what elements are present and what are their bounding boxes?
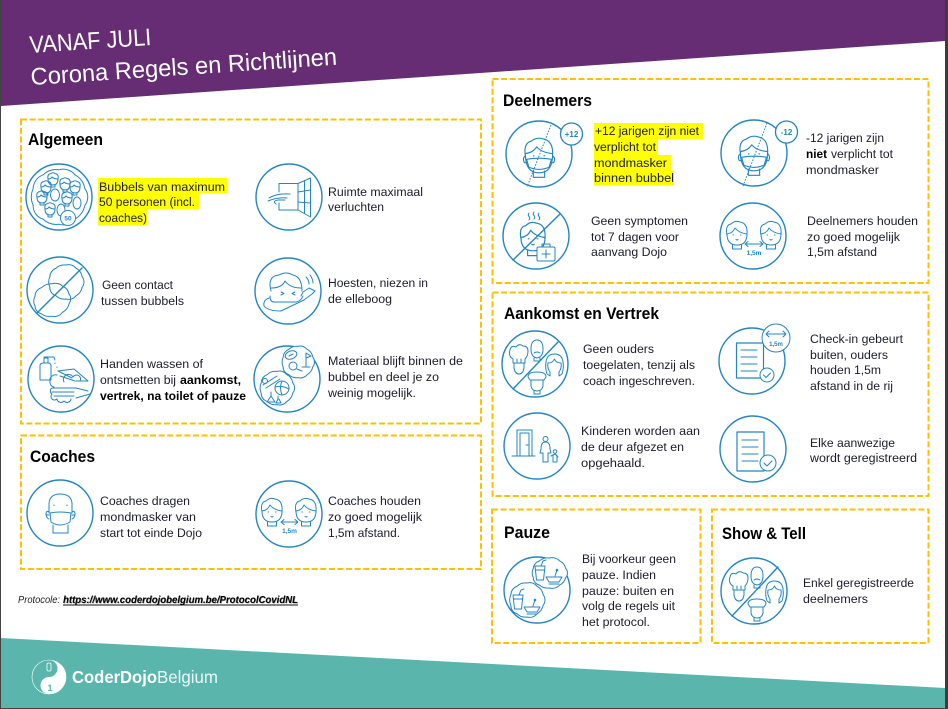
text: elke aanwezige: wordt geregistreerd	[809, 451, 917, 465]
text: handen	[100, 357, 246, 403]
text: pauze: pauze: buiten en	[582, 584, 674, 598]
icon: no parents	[502, 331, 568, 397]
text: geen symptomen: aanvang Dojo	[591, 245, 667, 259]
panel: Aankomst en Vertrek	[492, 292, 928, 496]
icon: participants 1,5m distance: 1,5m	[747, 250, 762, 257]
text: coaches mondmasker: Coaches dragen	[100, 494, 190, 508]
icon: washing hands	[28, 346, 94, 412]
text: geen contact: tussen bubbels	[101, 294, 184, 308]
icon: open window	[256, 164, 322, 230]
icon: coach with mask	[27, 480, 93, 546]
icon: -12 mask	[721, 120, 798, 186]
text: deelnemers afstand: Deelnemers houden	[807, 214, 918, 228]
title: Corona Regels en Richtlijnen	[30, 44, 338, 91]
text: +12: verplicht tot	[594, 140, 657, 154]
text: kinderen: Kinderen worden aan	[581, 424, 700, 438]
text: geen symptomen	[591, 214, 688, 259]
icon: yin yang logo	[32, 660, 66, 694]
text: show and tell: Enkel geregistreerde	[803, 576, 914, 590]
panel: Deelnemers	[492, 79, 928, 283]
heading: Deelnemers: Deelnemers	[503, 91, 592, 110]
heading: Coaches: Coaches	[30, 447, 95, 466]
text: ruimte: verluchten	[328, 200, 384, 214]
heading: Algemeen: Algemeen	[28, 130, 103, 149]
text: geen contact	[101, 278, 184, 308]
text: show and tell: deelnemers	[803, 592, 868, 606]
icon: no symptoms	[503, 203, 569, 269]
text: check-in: houden 1,5m	[810, 363, 881, 377]
icon: materials in bubbles	[254, 346, 320, 412]
icon: register document	[720, 416, 786, 482]
text: materiaal: weinig mogelijk.	[327, 386, 416, 400]
text: coaches afstand: 1,5m afstand.	[328, 526, 400, 540]
icon: check-in document	[719, 324, 790, 394]
protocol link: Protocole:	[18, 594, 60, 606]
icon: bubble of 50 people	[26, 164, 92, 230]
logo: CoderDojo Belgium: CoderDojo	[72, 667, 157, 687]
text: hoesten: de elleboog	[328, 292, 392, 306]
window edge: left	[0, 0, 1, 709]
text: -12	[806, 131, 894, 177]
logo: CoderDojo Belgium: Belgium	[157, 667, 218, 687]
text: materiaal: bubbel en deel je zo	[328, 370, 439, 384]
text: deelnemers afstand	[807, 214, 918, 259]
icon: -12 mask: -12	[781, 128, 793, 137]
text: materiaal: Materiaal blijft binnen de	[328, 354, 463, 368]
text: check-in	[810, 332, 904, 393]
text: kinderen	[581, 424, 700, 470]
text: deelnemers afstand: 1,5m afstand	[807, 245, 877, 259]
text: +12: +12 jarigen zijn niet	[595, 124, 700, 138]
panel: Show & Tell	[712, 510, 928, 643]
icon: door with parent and child	[504, 413, 570, 479]
text: check-in: afstand in de rij	[810, 379, 893, 393]
header banner	[1, 0, 945, 106]
text: hoesten	[328, 276, 428, 306]
text: -12: verplicht tot	[831, 147, 894, 161]
text: geen ouders	[583, 342, 695, 388]
text: bubbels: 50 personen (incl.	[99, 195, 195, 209]
text: pauze: volg de regels uit	[582, 599, 676, 613]
icon: coaches 1,5m distance: 1,5m	[282, 528, 297, 535]
text: hoesten: Hoesten, niezen in	[328, 276, 428, 290]
heading: Aankomst en Vertrek: Aankomst en Vertrek	[504, 304, 659, 323]
heading: Show & Tell: Show & Tell	[722, 524, 806, 543]
icon: participants 1,5m distance	[720, 203, 786, 269]
text: pauze: Bij voorkeur geen	[582, 552, 676, 566]
text: coaches afstand	[328, 494, 423, 540]
text: -12: niet	[806, 147, 827, 161]
title: VANAF JULI	[29, 24, 152, 59]
text: check-in: Check-in gebeurt	[810, 332, 904, 346]
window edge: right	[945, 0, 948, 709]
text: coaches afstand: Coaches houden	[328, 494, 421, 508]
protocol link: https://www.coderdojobelgium.be/ProtocolCovidNL	[63, 594, 298, 606]
text: +12: binnen bubbel	[594, 171, 674, 185]
icon: +12 mask	[506, 121, 582, 187]
text: -12: -12 jarigen zijn	[806, 131, 884, 145]
text: coaches mondmasker	[100, 494, 202, 540]
heading: Pauze: Pauze	[504, 523, 550, 542]
icon: coaches 1,5m distance	[256, 481, 322, 547]
icon: cough in elbow	[255, 258, 321, 324]
text: bubbels: coaches)	[99, 211, 147, 225]
logo: CoderDojo Belgium	[32, 660, 218, 694]
text: handen: ontsmetten bij	[100, 373, 176, 387]
text: pauze: pauze. Indien	[582, 568, 656, 582]
text: pauze: het protocol.	[582, 615, 650, 629]
text: bubbels: Bubbels van maximum	[99, 180, 225, 194]
text: geen ouders: coach ingeschreven.	[583, 374, 695, 388]
text: coaches mondmasker: mondmasker van	[100, 510, 196, 524]
text: pauze	[582, 552, 676, 629]
icon: check-in document: 1,5m	[769, 342, 783, 348]
text: +12	[594, 123, 703, 186]
text: ruimte: Ruimte maximaal	[328, 185, 423, 199]
protocol link: https://www.coderdojobelgium.be/ProtocolCovidNL	[64, 595, 299, 607]
text: handen: Handen wassen of	[100, 357, 204, 371]
panel: Coaches	[21, 436, 481, 569]
text: geen symptomen: tot 7 dagen voor	[591, 230, 679, 244]
window edge: bottom	[0, 708, 948, 709]
text: bubbels	[98, 178, 227, 226]
icon: bubble of 50 people: 50	[64, 216, 72, 222]
footer banner	[1, 638, 945, 708]
text: +12: mondmasker	[594, 156, 667, 170]
icon: break food in bubbles	[504, 557, 570, 623]
text: geen ouders: toegelaten, tenzij als	[583, 358, 695, 372]
panel: Pauze	[492, 510, 700, 643]
text: geen contact: Geen contact	[102, 278, 174, 292]
text: elke aanwezige: Elke aanwezige	[810, 436, 895, 450]
text: show and tell	[803, 576, 914, 606]
text: handen: aankomst,	[180, 373, 241, 387]
title	[28, 12, 338, 91]
text: kinderen: opgehaald.	[581, 456, 645, 470]
text: check-in: buiten, ouders	[810, 348, 888, 362]
text: elke aanwezige	[809, 436, 917, 465]
icon: +12 mask: +12	[565, 130, 579, 139]
text: geen symptomen: Geen symptomen	[591, 214, 688, 228]
text: handen: vertrek, na toilet of pauze	[100, 389, 246, 403]
text: deelnemers afstand: zo goed mogelijk	[807, 230, 901, 244]
panel: Algemeen	[21, 120, 481, 424]
text: coaches mondmasker: start tot einde Dojo	[100, 526, 202, 540]
icon: no unregistered people	[721, 558, 787, 624]
text: coaches afstand: zo goed mogelijk	[328, 510, 423, 524]
icon: yin yang logo: 1	[47, 683, 53, 693]
text: ruimte	[328, 185, 423, 214]
text: -12: mondmasker	[806, 163, 879, 177]
text: geen ouders: Geen ouders	[583, 342, 654, 356]
text: materiaal	[327, 354, 463, 400]
icon: no contact between bubbles	[27, 257, 93, 323]
text: kinderen: de deur afgezet en	[581, 440, 684, 454]
